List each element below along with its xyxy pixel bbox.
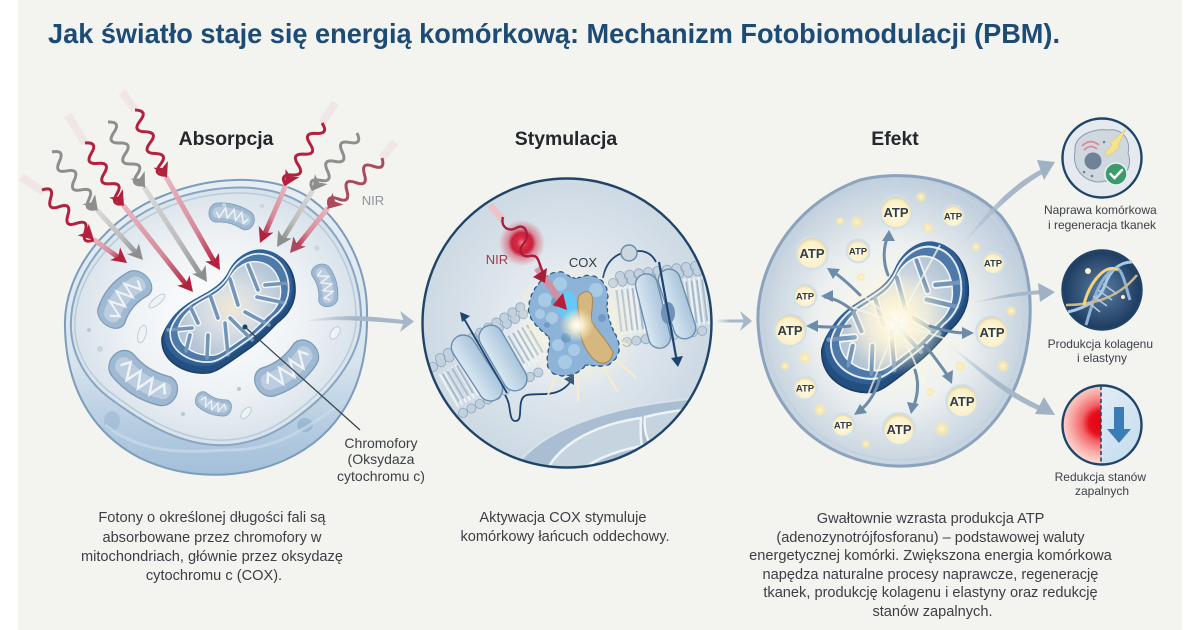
- ATP molecules: ATP: [979, 325, 1005, 340]
- label: i elastyny: [1077, 351, 1127, 365]
- callout: Chromofory: (Oksydaza: [348, 451, 415, 467]
- text: stimulation description: Aktywacja COX stymuluje: [479, 510, 647, 526]
- label: zapalnych: [1075, 484, 1129, 498]
- ATP arrowheads: [806, 230, 974, 415]
- outcome: inflammation reduction: [1055, 386, 1149, 498]
- illustration: NIR photon: [490, 205, 547, 283]
- label: NIR: NIR: [486, 252, 508, 267]
- ATP molecules: ATP: [949, 394, 975, 409]
- icon: repaired cell: [1062, 118, 1142, 198]
- text: absorption description: Fotony o określonej długości fali są: [98, 510, 326, 526]
- label: Redukcja stanów: [1055, 470, 1146, 484]
- heading: Absorpcja: Absorpcja: [179, 128, 274, 150]
- text: effect description: stanów zapalnych.: [872, 604, 993, 620]
- illustration: cell with mitochondrion: [758, 176, 1030, 466]
- label: COX: COX: [569, 255, 597, 270]
- panel: efekt: [749, 128, 1116, 620]
- arrows: [463, 251, 677, 421]
- ATP molecules: ATP: [799, 246, 825, 261]
- ATP molecules: ATP: [944, 212, 963, 222]
- callout: Chromofory: Chromofory: [344, 435, 418, 451]
- outcome: cell repair: [1044, 118, 1160, 232]
- label: Produkcja kolagenu: [1048, 337, 1153, 351]
- ATP molecules: ATP: [849, 246, 868, 258]
- nucleus: [522, 398, 688, 465]
- ATP molecules: ATP: [834, 420, 853, 432]
- proteins right: [634, 273, 672, 349]
- text: effect description: napędza naturalne procesy naprawcze, regenerację: [763, 567, 1098, 583]
- illustration: COX complex: [514, 261, 642, 402]
- proteins left: [450, 334, 504, 402]
- ATP release arrows: [812, 236, 968, 411]
- heads: [433, 264, 708, 413]
- icon: inflammation down: [1062, 386, 1142, 464]
- callout: Chromofory: [242, 324, 425, 484]
- ATP molecules: [774, 196, 1008, 445]
- icon: helix: [1062, 250, 1142, 330]
- outcome arrows: [952, 160, 1055, 415]
- ATP molecules: ATP: [984, 258, 1003, 270]
- text: stimulation description: komórkowy łańcuch oddechowy.: [460, 529, 670, 545]
- arrow: stymulacja to efekt: [716, 311, 752, 331]
- illustration: cell: [65, 180, 367, 475]
- ATP molecules: ATP: [796, 292, 815, 302]
- ATP molecules: ATP: [777, 323, 803, 338]
- callout: Chromofory: cytochromu c): [337, 468, 425, 484]
- text: effect description: (adenozynotrójfosforanu) – podstawowej waluty: [776, 530, 1085, 546]
- panel: absorpcja: [21, 92, 425, 584]
- text: absorption description: mitochondriach, głównie przez oksydazę: [81, 549, 343, 565]
- label: i regeneracja tkanek: [1048, 218, 1157, 232]
- text: absorption description: absorbowane przez chromofory w: [102, 530, 322, 546]
- text: absorption description: cytochromu c (COX).: [146, 568, 282, 584]
- label: NIR: NIR: [362, 193, 384, 208]
- text: effect description: Gwałtownie wzrasta produkcja ATP: [817, 511, 1044, 527]
- panel: stymulacja: [422, 128, 720, 545]
- text: effect description: energetycznej komórki. Zwiększona energia komórkowa: [749, 548, 1113, 564]
- text: effect description: tkanek, produkcję kolagenu i elastyny oraz redukcję: [763, 585, 1098, 601]
- arrow: absorpcja to stymulacja: [302, 311, 414, 332]
- heading: Stymulacja: Stymulacja: [515, 128, 617, 150]
- illustration: central mitochondrion: [162, 249, 295, 373]
- energy sparkles: [780, 191, 1017, 449]
- illustration: membrane circle: [422, 178, 720, 480]
- ATP molecules: ATP: [796, 384, 815, 394]
- title: Jak światło staje się energią komórkową: Mechanizm Fotobiomodulacji (PBM).: [48, 18, 1060, 49]
- heading: Efekt: Efekt: [871, 128, 919, 150]
- photon rays: red and NIR: [21, 92, 395, 297]
- outcome: collagen production: [1048, 250, 1156, 365]
- label: Naprawa komórkowa: [1044, 203, 1157, 217]
- tails: [448, 340, 538, 391]
- ATP molecules: ATP: [883, 205, 909, 220]
- ATP molecules: ATP: [886, 422, 912, 437]
